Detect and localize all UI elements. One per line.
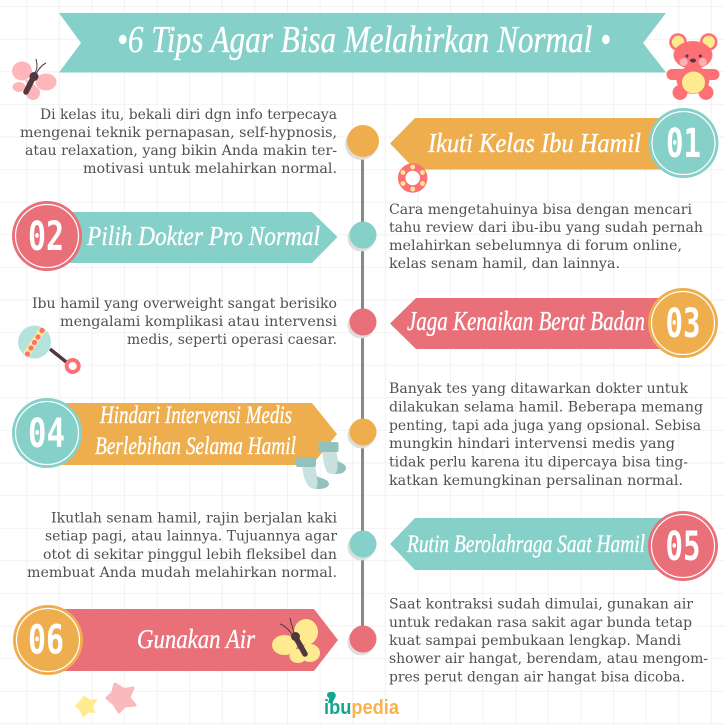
text: tip 4 description	[389, 381, 703, 489]
icon: swim ring	[401, 165, 425, 191]
banner: tip 01	[390, 108, 718, 178]
text: tip 2 description: kelas senam hamil, dan lainnya.	[389, 256, 620, 272]
text: tip 6 description	[389, 596, 708, 686]
heading: tip 05: Rutin Berolahraga Saat Hamil	[406, 531, 645, 558]
text: tip 2 description: melahirkan sebelumnya di forum online,	[389, 238, 682, 254]
text: tip 2 description: Cara mengetahuinya bisa dengan mencari	[389, 202, 693, 218]
heading: tip 04 line 1: Hindari Intervensi Medis	[99, 402, 292, 429]
timeline dot 6	[348, 626, 376, 656]
badge: 01: 01	[666, 121, 701, 167]
banner: tip 05	[390, 511, 718, 581]
text: tip 3 description: medis, seperti operasi caesar.	[127, 332, 337, 348]
badge: 04: 04	[28, 411, 65, 457]
badge: 04	[12, 398, 82, 468]
text: tip 6 description: shower air hangat, berendam, atau mengom-	[389, 651, 708, 667]
badge: 03: 03	[666, 301, 700, 347]
title banner	[59, 13, 666, 72]
icon: baby socks	[296, 442, 346, 489]
timeline dot 3	[348, 308, 376, 338]
text: tip 6 description: kuat sampai pembukaan lengkap. Mandi	[389, 633, 682, 649]
text: tip 5 description	[27, 510, 338, 581]
text: tip 6 description: untuk redakan rasa sakit agar bunda tetap	[389, 615, 692, 631]
timeline dot 5	[348, 530, 376, 560]
timeline dot 2	[348, 222, 376, 252]
banner: tip 04	[12, 398, 337, 468]
banner: tip 03	[390, 288, 718, 358]
text: tip 6 description: Saat kontraksi sudah dimulai, gunakan air	[389, 596, 693, 612]
text: tip 1 description: motivasi untuk melahirkan normal.	[83, 161, 337, 177]
heading: tip 02: Pilih Dokter Pro Normal	[86, 221, 320, 251]
icon: teddy bear	[669, 33, 718, 100]
text: tip 4 description: mungkin hindari intervensi medis yang	[389, 436, 675, 452]
logo: ibupedia	[324, 697, 400, 719]
text: tip 5 description: Ikutlah senam hamil, rajin berjalan kaki	[51, 510, 338, 526]
heading: tip 01: Ikuti Kelas Ibu Hamil	[427, 128, 641, 158]
text: tip 5 description: setiap pagi, atau lainnya. Tujuannya agar	[45, 528, 337, 544]
icon: baby rattle	[18, 326, 79, 372]
timeline dot 4	[348, 418, 376, 448]
text: tip 5 description: membuat Anda mudah melahirkan normal.	[27, 565, 337, 581]
text: tip 1 description: mengenai teknik pernapasan, self-hypnosis,	[20, 125, 337, 141]
badge: 05	[648, 511, 718, 581]
text: tip 2 description	[389, 202, 703, 272]
badge: 03	[648, 288, 718, 358]
text: tip 4 description: tidak perlu karena itu dipercaya bisa ting-	[389, 454, 688, 470]
text: tip 1 description: atau relaxation, yang bikin Anda makin ter-	[25, 143, 337, 159]
text: tip 4 description: Banyak tes yang ditawarkan dokter untuk	[389, 381, 689, 397]
badge: 05: 05	[666, 524, 700, 570]
title: •6 Tips Agar Bisa Melahirkan Normal •	[117, 19, 611, 61]
text: tip 3 description: mengalami komplikasi atau intervensi	[60, 314, 338, 330]
timeline dot 1	[345, 125, 379, 160]
timeline	[345, 125, 379, 656]
text: tip 1 description: Di kelas itu, bekali diri dgn info terpecaya	[40, 107, 337, 123]
text: tip 3 description: Ibu hamil yang overweight sangat berisiko	[32, 296, 337, 312]
badge: 01	[648, 108, 718, 178]
text: tip 6 description: pres perut dengan air hangat bisa dicoba.	[389, 670, 685, 686]
text: tip 1 description	[20, 107, 337, 177]
text: tip 4 description: dilakukan selama hamil. Beberapa memang	[389, 400, 703, 416]
text: tip 4 description: penting, tapi ada juga yang opsional. Sebisa	[389, 418, 701, 434]
icon: stars	[76, 684, 135, 716]
text: tip 2 description: tahu review dari ibu-ibu yang sudah pernah	[389, 220, 703, 236]
badge: 02: 02	[28, 214, 64, 260]
banner: tip 06	[13, 605, 338, 675]
text: tip 5 description: otot di sekitar pinggul lebih fleksibel dan	[43, 547, 337, 563]
banner: tip 02	[12, 201, 338, 271]
badge: 06	[13, 605, 83, 675]
text: tip 3 description	[32, 296, 338, 348]
icon: yellow butterfly	[272, 618, 320, 663]
heading: tip 03: Jaga Kenaikan Berat Badan	[407, 306, 645, 336]
text: tip 4 description: katkan kemungkinan persalinan normal.	[389, 473, 683, 489]
badge: 06: 06	[28, 618, 64, 664]
icon: pink butterfly	[12, 59, 56, 100]
heading: tip 04 line 2: Berlebihan Selama Hamil	[95, 433, 296, 460]
badge: 02	[12, 201, 82, 271]
heading: tip 06: Gunakan Air	[137, 624, 255, 654]
